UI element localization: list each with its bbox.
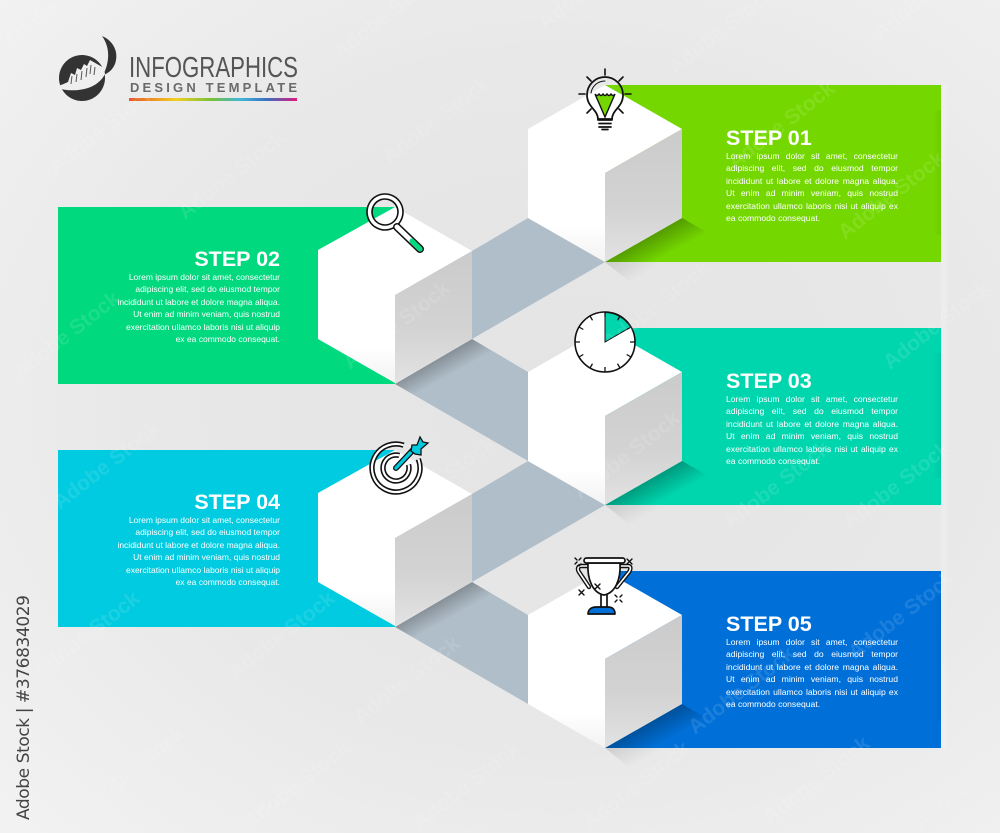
heading: step 03: STEP 03 [726,369,812,393]
text: step 02: incididunt ut labore et dolore magna aliqua. [117,297,280,307]
text: step 03: adipiscing elit, sed do eiusmod tempor [726,406,898,416]
text: step 02: Lorem ipsum dolor sit amet, consectetur [129,272,280,282]
text: step 03: ea commodo consequat. [726,456,820,466]
text: step 04: ex ea commodo consequat. [176,577,280,587]
rainbow bar [129,98,297,101]
text: step 01: Ut enim ad minim veniam, quis nostrud [726,188,898,198]
panel: step 01 [528,68,941,276]
text: step 04 [117,515,280,587]
watermarks: Adobe Stock [349,632,464,729]
heading: step 01: STEP 01 [726,126,812,150]
watermarks: Adobe Stock [339,277,454,374]
band: step 05 [605,571,941,748]
text: step 03: exercitation ullamco laboris nisi ut aliquip ex [726,444,898,454]
text: step 02 [117,272,280,344]
watermarks: Adobe Stock [9,287,124,384]
band: step 04 [58,450,395,627]
watermarks: Adobe Stock [519,122,634,219]
band: step 02 [58,207,395,384]
text: step 03 [726,394,898,466]
text: step 04: Lorem ipsum dolor sit amet, consectetur [129,515,280,525]
watermarks: Adobe Stock [599,257,714,354]
band: step 03 [605,328,941,505]
text: step 05: adipiscing elit, sed do eiusmod tempor [726,649,898,659]
watermarks: Adobe Stock [879,277,994,374]
panel: step 03 [528,311,941,518]
text: step 05: Lorem ipsum dolor sit amet, consectetur [726,637,898,647]
stock id label: Adobe Stock | #376834029 [14,595,34,820]
text: step 02: Ut enim ad minim veniam, quis nostrud [133,309,280,319]
text: step 01: incididunt ut labore et dolore magna aliqua. [726,176,898,186]
text: step 04: incididunt ut labore et dolore magna aliqua. [117,540,280,550]
icon: logo mark [53,36,116,101]
text: step 05: exercitation ullamco laboris nisi ut aliquip ex [726,687,898,697]
text: step 01: Lorem ipsum dolor sit amet, consectetur [726,151,898,161]
heading: step 04: STEP 04 [194,490,280,514]
cube: step 03 [528,328,682,505]
watermarks: Adobe Stock [579,737,694,833]
text: step 02: ex ea commodo consequat. [176,334,280,344]
text: step 01: adipiscing elit, sed do eiusmod tempor [726,163,898,173]
text: step 02: adipiscing elit, sed do eiusmod tempor [135,284,280,294]
text: step 04: Ut enim ad minim veniam, quis nostrud [133,552,280,562]
text: step 05: incididunt ut labore et dolore magna aliqua. [726,662,898,672]
icon: light bulb [579,69,631,130]
text: step 04: adipiscing elit, sed do eiusmod tempor [135,527,280,537]
watermarks: Adobe Stock [684,642,799,739]
heading: step 05: STEP 05 [726,612,812,636]
heading: step 02: STEP 02 [194,247,280,271]
text: step 01: ea commodo consequat. [726,213,820,223]
text: step 03: Lorem ipsum dolor sit amet, consectetur [726,394,898,404]
text: step 04: exercitation ullamco laboris nisi ut aliquip [126,565,280,575]
watermarks: Adobe Stock [44,82,159,179]
watermarks: Adobe Stock [384,432,499,529]
cube: step 04 [318,450,472,626]
icon: trophy [575,558,632,614]
band: step 01 [605,85,941,262]
cube: step 05 [528,571,682,748]
panel: step 02 [58,193,472,384]
icon: target [365,437,428,499]
watermarks: Adobe Stock [839,437,954,534]
text: step 05: Ut enim ad minim veniam, quis nostrud [726,674,898,684]
logo [59,36,298,101]
watermarks: Adobe Stock [409,737,524,833]
text: step 02: exercitation ullamco laboris nisi ut aliquip [126,322,280,332]
watermarks: Adobe Stock [49,417,164,514]
watermarks: Adobe Stock [759,732,874,829]
watermarks: Adobe Stock [719,437,834,534]
watermarks: Adobe Stock [554,597,669,694]
watermarks: Adobe Stock [724,77,839,174]
subtitle: DESIGN TEMPLATE [130,80,297,95]
watermarks: Adobe Stock [224,587,339,684]
watermarks: Adobe Stock [569,407,684,504]
text: step 01: exercitation ullamco laboris nisi ut aliquip ex [726,201,898,211]
icon: clock [575,312,635,372]
watermarks: Adobe Stock [74,722,189,819]
watermarks: Adobe Stock [174,127,289,224]
watermarks: Adobe Stock [834,147,949,244]
icon: magnifier [367,194,420,249]
watermarks: Adobe Stock [379,72,494,169]
text: step 03: Ut enim ad minim veniam, quis nostrud [726,431,898,441]
watermarks: Adobe Stock [239,737,354,833]
cube: step 01 [528,85,682,262]
text: step 05: ea commodo consequat. [726,699,820,709]
text: step 05 [726,637,898,709]
text: step 03: incididunt ut labore et dolore magna aliqua. [726,419,898,429]
panel: step 04 [58,436,472,627]
panel: step 05 [528,557,941,762]
watermarks: Adobe Stock [29,587,144,684]
text: step 01 [726,151,898,223]
title: INFOGRAPHICS [129,52,298,84]
watermarks: Adobe Stock [844,567,959,664]
cube: step 02 [318,207,472,383]
